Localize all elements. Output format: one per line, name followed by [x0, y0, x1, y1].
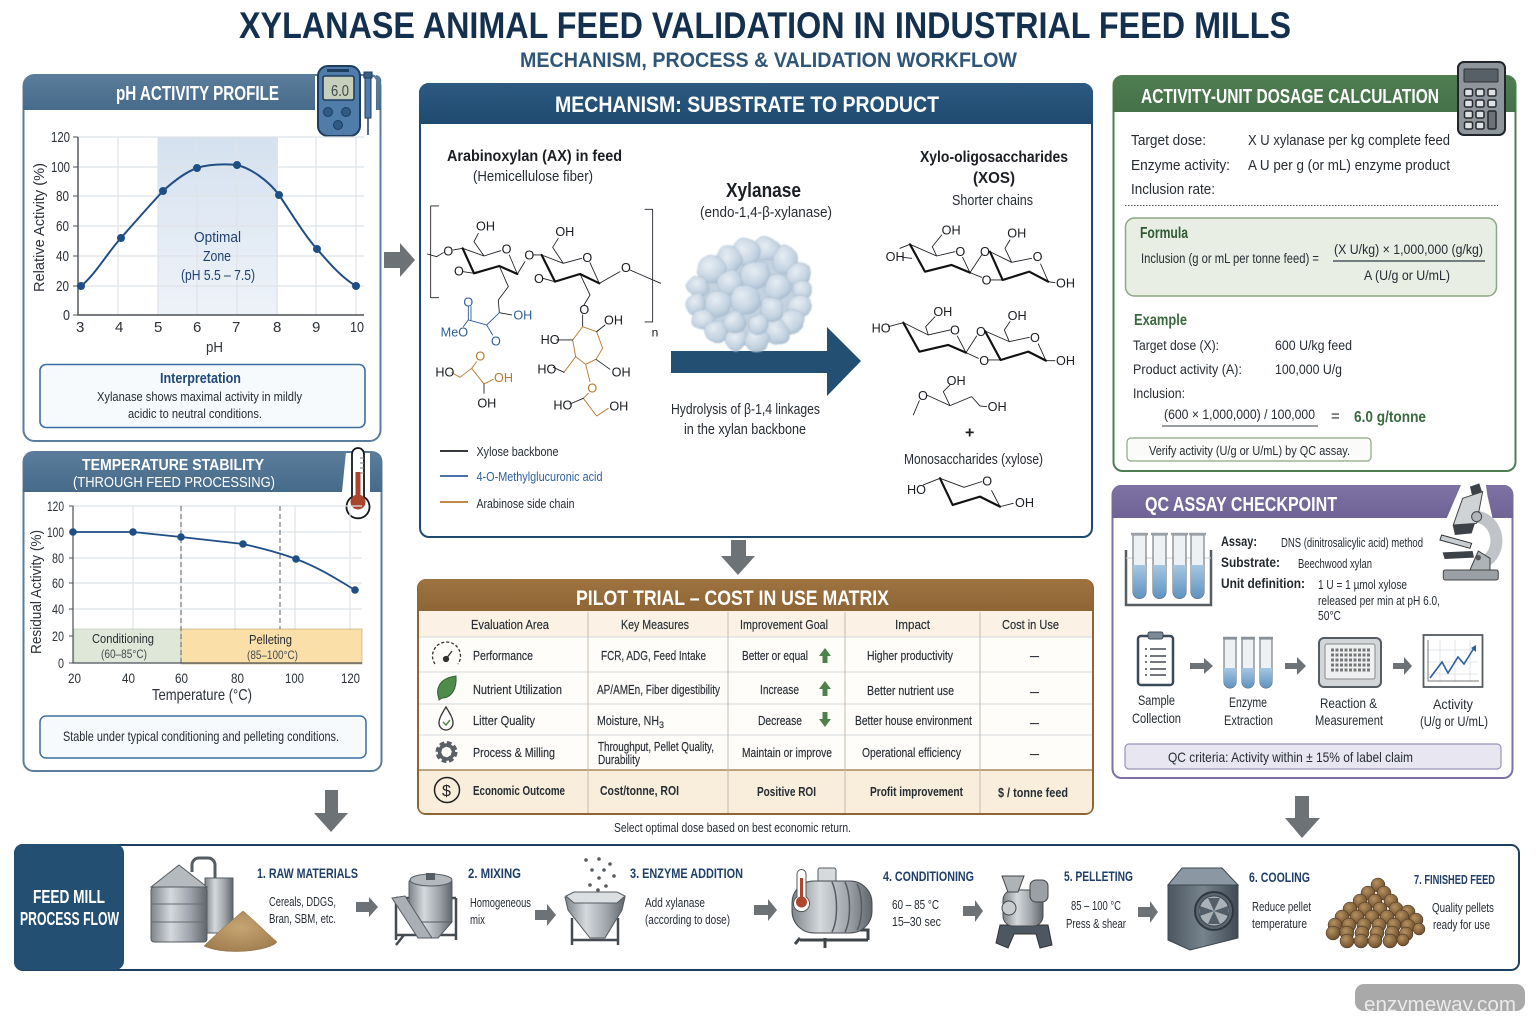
arabinoxylan structure: OH	[477, 396, 496, 410]
QC step: reaction and measurement: Measurement	[1315, 712, 1383, 728]
pH activity line chart: Relative Activity (%)	[31, 163, 48, 292]
icon: pH meter	[318, 66, 378, 136]
XOS structures: O	[955, 245, 965, 259]
step 6: cooling: 6. COOLING	[1249, 869, 1310, 885]
pH activity line chart: 20	[56, 278, 69, 295]
QC step: sample collection: Sample	[1138, 692, 1175, 708]
step 2: mixing: 2. MIXING	[468, 865, 521, 881]
panel: dosage calculation	[1113, 62, 1516, 471]
goal arrows	[819, 648, 831, 727]
temperature stability chart: 100	[285, 670, 304, 686]
row: process and milling: Operational efficiency	[862, 745, 961, 760]
QC step: activity: (U/g or U/mL)	[1420, 713, 1488, 729]
step 1: raw materials: Bran, SBM, etc.	[269, 911, 336, 926]
icon: gear	[438, 744, 454, 760]
enzyme heading	[700, 180, 832, 221]
step 7: finished feed: 7. FINISHED FEED	[1414, 872, 1495, 887]
arrow: step 1 to 2	[356, 897, 378, 917]
XOS structures: O	[979, 354, 989, 368]
XOS structures: OH	[1056, 276, 1075, 290]
temperature stability chart: 100	[47, 524, 64, 540]
QC header	[1112, 485, 1513, 518]
icon: pH meter: 6.0	[331, 83, 349, 100]
temperature stability chart	[28, 498, 362, 704]
XOS structures: OH	[1007, 227, 1026, 241]
column header row: Improvement Goal	[740, 617, 828, 632]
optimal zone label: Optimal	[194, 229, 241, 246]
temperature stability chart: 40	[122, 670, 135, 686]
pH activity line chart: 10	[350, 319, 364, 336]
worked example: Target dose (X):	[1133, 337, 1219, 353]
temperature stability chart: 120	[47, 498, 64, 514]
panel: temperature stability	[23, 448, 382, 771]
step 2: mixing: Homogeneous	[470, 895, 531, 910]
panel: pH activity profile	[23, 66, 381, 441]
icon: mixer	[392, 873, 456, 945]
QC criteria: QC criteria: Activity within ± 15% of label claim	[1168, 749, 1413, 765]
row: nutrient utilization: Increase	[760, 682, 799, 697]
pelleting band: Pelleting	[249, 632, 292, 647]
arabinoxylan structure: HO	[541, 333, 560, 347]
arabinoxylan structure: O	[502, 243, 512, 257]
XOS structures: OH	[988, 400, 1007, 414]
stability callout	[40, 716, 366, 758]
temperature stability chart: 120	[341, 670, 360, 686]
legend	[440, 444, 602, 511]
hydrolysis caption: Hydrolysis of β-1,4 linkages	[671, 402, 820, 418]
pH activity line chart: 0	[63, 307, 70, 324]
worked example: Example	[1134, 312, 1187, 329]
arabinoxylan structure: OH	[476, 220, 495, 234]
hydrolysis caption	[671, 402, 820, 438]
optimal zone label: (pH 5.5 – 7.5)	[181, 267, 255, 284]
QC step: activity: Activity	[1433, 696, 1473, 712]
interpretation callout	[40, 364, 365, 428]
step 1: raw materials	[257, 865, 358, 926]
XOS structures: O	[982, 274, 992, 288]
icon: test tube rack	[1126, 534, 1211, 605]
row: economic outcome: Positive ROI	[757, 784, 816, 799]
arabinoxylan structure: O	[443, 244, 453, 258]
arabinoxylan structure	[427, 206, 661, 416]
row: process and milling	[473, 740, 1040, 767]
arrow: step 2 to 3	[535, 904, 556, 926]
temperature stability chart: 40	[52, 601, 64, 617]
watermark	[1350, 984, 1530, 1024]
XOS structures: HO	[872, 321, 891, 335]
step 3: enzyme addition: 3. ENZYME ADDITION	[630, 865, 743, 881]
pH activity line chart	[31, 129, 364, 356]
conditioning band: (60–85°C)	[101, 647, 147, 661]
temperature stability chart: 60	[52, 575, 64, 591]
step 4: conditioning: 4. CONDITIONING	[883, 868, 974, 884]
arrow: QC step 2	[1285, 657, 1306, 675]
pH activity line chart: 7	[232, 319, 240, 336]
QC step: enzyme extraction	[1223, 638, 1273, 728]
temperature stability chart: 80	[52, 550, 64, 566]
XOS structures: O	[1033, 250, 1043, 264]
XOS structures: O	[980, 245, 990, 259]
enzyme heading: Xylanase	[726, 180, 801, 202]
process flow label	[14, 844, 124, 970]
XOS structures: OH	[1015, 496, 1034, 510]
row: process and milling: Durability	[598, 753, 641, 767]
XOS structures: OH	[1008, 309, 1027, 323]
worked example: 6.0 g/tonne	[1354, 409, 1426, 426]
arabinoxylan structure: HO	[553, 398, 572, 412]
icon: cooler	[1168, 868, 1238, 950]
row: nutrient utilization: Nutrient Utilization	[473, 682, 562, 697]
arabinoxylan structure: n	[652, 326, 658, 340]
step 7: finished feed	[1414, 872, 1495, 932]
arabinoxylan structure: MeO	[441, 325, 468, 339]
XOS structures: HO	[907, 483, 926, 497]
row: performance	[473, 648, 1040, 663]
pH activity line chart: 120	[51, 129, 70, 146]
interpretation callout: Xylanase shows maximal activity in mildly	[97, 389, 302, 404]
row: performance: –	[1030, 648, 1040, 663]
worked example: =	[1331, 408, 1340, 425]
step 4: conditioning: 15–30 sec	[892, 914, 941, 929]
row: performance: Higher productivity	[867, 648, 953, 663]
row: litter quality: Moisture, NH	[597, 713, 659, 728]
pH activity line chart: 4	[115, 319, 123, 336]
XOS structures: OH	[886, 250, 905, 264]
optimal zone label	[181, 229, 255, 284]
row: performance: Performance	[473, 648, 533, 663]
arabinoxylan structure: OH	[555, 225, 574, 239]
icon: water drop	[439, 707, 453, 730]
XOS structures: OH	[1056, 354, 1075, 368]
assay details: DNS (dinitrosalicylic acid) method	[1281, 536, 1423, 550]
assay details: Assay:	[1221, 533, 1257, 549]
XOS structures: O	[976, 325, 986, 339]
row: litter quality: Litter Quality	[473, 713, 535, 728]
monosaccharides label: Monosaccharides (xylose)	[904, 452, 1043, 468]
step 6: cooling: Reduce pellet	[1252, 899, 1311, 914]
temperature stability chart: Temperature (°C)	[152, 687, 252, 704]
formula box: Formula	[1140, 225, 1188, 242]
arrow: step 4 to 5	[963, 900, 983, 922]
arabinoxylan structure: O	[534, 272, 544, 286]
assay details: released per min at pH 6.0,	[1318, 594, 1440, 608]
dose definitions: X U xylanase per kg complete feed	[1248, 132, 1450, 149]
arabinoxylan heading: Arabinoxylan (AX) in feed	[447, 148, 622, 165]
formula box: Inclusion (g or mL per tonne feed) =	[1141, 251, 1319, 266]
icon: calculator	[1458, 62, 1505, 135]
pH activity line chart: 5	[154, 319, 162, 336]
pH activity line chart: 8	[273, 319, 281, 336]
assay details: Unit definition:	[1221, 575, 1305, 591]
arabinoxylan structure: O	[621, 261, 631, 275]
pH activity line chart: 6	[193, 319, 201, 336]
XOS structures: OH	[942, 223, 961, 237]
icon: leaf	[438, 676, 456, 700]
icon: silo and grain	[151, 858, 277, 952]
temperature stability chart: 80	[231, 670, 244, 686]
column header row	[419, 611, 1092, 637]
icon: microscope	[1440, 478, 1498, 580]
row: economic outcome: Cost/tonne, ROI	[600, 783, 679, 798]
hydrolysis caption: in the xylan backbone	[684, 422, 806, 438]
arabinoxylan structure: O	[579, 303, 589, 317]
dose definitions: Target dose:	[1131, 132, 1206, 149]
assay details: Beechwood xylan	[1298, 557, 1372, 571]
arabinoxylan structure: O	[454, 264, 464, 278]
XOS structures: O	[982, 474, 992, 488]
temperature stability chart: 0	[58, 655, 64, 671]
watermark: enzymeway.com	[1364, 994, 1516, 1016]
XOS structures: O	[1030, 331, 1040, 345]
temperature stability chart: Residual Activity (%)	[28, 530, 45, 654]
interpretation callout: Interpretation	[160, 370, 241, 387]
assay details	[1221, 533, 1440, 623]
arabinoxylan structure: O	[491, 334, 501, 348]
assay details: 50°C	[1318, 609, 1341, 623]
matrix header	[418, 579, 1093, 611]
column header row: Cost in Use	[1002, 617, 1059, 632]
arrow: hydrolysis	[671, 327, 861, 396]
icon: enzyme hopper	[565, 857, 625, 945]
arabinoxylan structure: OH	[612, 365, 631, 379]
row: litter quality: Decrease	[758, 713, 802, 728]
pH activity line chart: 3	[76, 319, 84, 336]
step 5: pelleting	[1064, 868, 1133, 931]
arabinoxylan structure: HO	[537, 362, 556, 376]
row: litter quality	[473, 713, 1040, 730]
mechanism header: MECHANISM: SUBSTRATE TO PRODUCT	[555, 92, 939, 117]
XOS heading: Xylo-oligosaccharides	[920, 149, 1068, 166]
step 4: conditioning: 60 – 85 °C	[892, 897, 939, 912]
step 5: pelleting: Press & shear	[1066, 916, 1126, 931]
XOS structures: OH	[947, 374, 966, 388]
row: nutrient utilization	[473, 682, 1040, 699]
QC step: enzyme extraction: Enzyme	[1229, 694, 1267, 710]
XOS structures: OH	[933, 305, 952, 319]
step 3: enzyme addition	[630, 865, 743, 927]
dose definitions: Enzyme activity:	[1131, 157, 1230, 174]
icon: gauge	[432, 642, 461, 664]
arrow: step 5 to 6	[1138, 901, 1158, 923]
legend: Arabinose side chain	[476, 496, 574, 511]
verify note	[1127, 438, 1371, 461]
formula box	[1126, 218, 1496, 296]
worked example: 100,000 U/g	[1275, 361, 1342, 377]
temperature stability chart: 60	[175, 670, 188, 686]
QC header: QC ASSAY CHECKPOINT	[1145, 494, 1337, 516]
mechanism header	[419, 83, 1093, 124]
process flow label: FEED MILL	[33, 887, 105, 907]
step 5: pelleting: 85 – 100 °C	[1071, 898, 1121, 913]
worked example: 600 U/kg feed	[1275, 337, 1352, 353]
XOS structures: O	[950, 323, 960, 337]
icon: dollar	[434, 778, 460, 802]
row: process and milling: Process & Milling	[473, 745, 555, 760]
row: nutrient utilization: –	[1030, 684, 1040, 699]
row: process and milling: –	[1030, 746, 1040, 761]
temperature panel header: (THROUGH FEED PROCESSING)	[73, 474, 275, 491]
XOS structures: +	[965, 424, 974, 441]
panel: mechanism	[419, 83, 1093, 537]
QC criteria	[1125, 744, 1501, 769]
XOS heading	[920, 149, 1068, 209]
worked example: (600 × 1,000,000) / 100,000	[1164, 406, 1315, 422]
pelleting band: (85–100°C)	[247, 648, 298, 662]
row: performance: FCR, ADG, Feed Intake	[601, 648, 706, 663]
dosage header	[1113, 76, 1516, 112]
dose definitions: Inclusion rate:	[1131, 181, 1215, 198]
panel: QC assay	[1112, 478, 1513, 778]
QC step: reaction and measurement: Reaction &	[1320, 695, 1378, 711]
pH activity line chart: 100	[51, 159, 70, 176]
XOS structures	[872, 223, 1075, 510]
row: economic outcome: Profit improvement	[870, 784, 964, 799]
subtitle: MECHANISM, PROCESS & VALIDATION WORKFLOW	[520, 49, 1017, 72]
assay details: Substrate:	[1221, 554, 1280, 570]
arabinoxylan structure: O	[463, 296, 473, 310]
icon: pellet mill	[996, 876, 1052, 948]
step 4: conditioning	[883, 868, 974, 929]
verify note: Verify activity (U/g or U/mL) by QC assay.	[1149, 443, 1350, 458]
step 3: enzyme addition: Add xylanase	[645, 895, 705, 910]
temperature stability chart: 20	[68, 670, 81, 686]
row: economic outcome: Economic Outcome	[473, 783, 565, 798]
row: performance: Better or equal	[742, 648, 808, 663]
arabinoxylan heading: (Hemicellulose fiber)	[473, 168, 593, 185]
arabinoxylan structure: HO	[435, 366, 454, 380]
arabinoxylan structure: OH	[604, 314, 623, 328]
step 7: finished feed: ready for use	[1433, 917, 1490, 932]
legend: Xylose backbone	[476, 444, 558, 459]
arabinoxylan structure: O	[475, 349, 485, 363]
enzyme heading: (endo-1,4-β-xylanase)	[700, 204, 832, 221]
title: XYLANASE ANIMAL FEED VALIDATION IN INDUSTRIAL FEED MILLS	[239, 5, 1291, 46]
arrow: mechanism to matrix	[721, 540, 755, 575]
icon: xylanase enzyme	[685, 236, 812, 352]
pelleting band	[181, 629, 362, 664]
QC step: reaction and measurement	[1315, 638, 1383, 728]
pH activity line chart: 40	[56, 248, 69, 265]
XOS heading: (XOS)	[973, 170, 1015, 187]
conditioning band	[74, 629, 181, 663]
matrix rows	[419, 612, 1092, 813]
QC step: enzyme extraction: Extraction	[1224, 712, 1273, 728]
formula box: (X U/kg) × 1,000,000 (g/kg)	[1334, 242, 1483, 257]
pH activity line chart: 9	[312, 319, 320, 336]
arabinoxylan structure: O	[587, 381, 597, 395]
step 2: mixing: mix	[470, 912, 485, 927]
dose definitions	[1131, 132, 1451, 198]
optimal zone label: Zone	[203, 248, 231, 265]
arrow: QC step 3	[1393, 657, 1412, 675]
QC step: sample collection	[1132, 632, 1181, 726]
arabinoxylan structure: OH	[494, 371, 513, 385]
column header row: Key Measures	[621, 617, 689, 632]
row: litter quality: –	[1030, 715, 1040, 730]
assay details: 1 U = 1 µmol xylose	[1318, 578, 1407, 592]
arrow: QC step 1	[1190, 658, 1213, 674]
row: litter quality: Better house environment	[855, 713, 972, 728]
icon: feed pellets	[1326, 878, 1425, 948]
icon: conditioner	[792, 868, 872, 948]
stability callout: Stable under typical conditioning and pelleting conditions.	[63, 728, 339, 744]
pH panel header	[23, 75, 381, 110]
matrix header: PILOT TRIAL – COST IN USE MATRIX	[576, 587, 889, 610]
arabinoxylan structure: O	[524, 249, 534, 263]
conditioning band: Conditioning	[92, 631, 154, 646]
pH activity line chart: pH	[206, 339, 223, 356]
step 7: finished feed: Quality pellets	[1432, 900, 1494, 915]
worked example: Inclusion:	[1133, 385, 1185, 401]
temperature stability chart: 20	[52, 628, 64, 644]
pH activity line chart: 80	[56, 188, 69, 205]
icon: thermometer	[345, 448, 371, 518]
arabinoxylan heading	[447, 148, 622, 185]
dosage header: ACTIVITY-UNIT DOSAGE CALCULATION	[1141, 86, 1439, 108]
XOS heading: Shorter chains	[952, 192, 1033, 209]
column header row: Impact	[895, 617, 930, 632]
arabinoxylan structure: O	[582, 251, 592, 265]
row: process and milling: Throughput, Pellet Quality,	[598, 740, 714, 754]
step 1: raw materials: Cereals, DDGS,	[269, 894, 336, 909]
row: litter quality: 3	[659, 720, 664, 730]
step 2: mixing	[468, 865, 531, 927]
dose definitions: A U per g (or mL) enzyme product	[1248, 157, 1451, 174]
step 6: cooling	[1249, 869, 1311, 931]
formula box: A (U/g or U/mL)	[1364, 268, 1450, 283]
panel: pilot trial matrix	[418, 579, 1093, 814]
column header row: Evaluation Area	[471, 617, 550, 632]
worked example	[1133, 312, 1426, 426]
arrow: QC to process flow	[1285, 796, 1320, 838]
row: nutrient utilization: AP/AMEn, Fiber digestibility	[597, 682, 720, 697]
QC step: sample collection: Collection	[1132, 710, 1181, 726]
step 6: cooling: temperature	[1252, 916, 1307, 931]
icon: dollar: $	[442, 783, 451, 800]
interpretation callout: acidic to neutral conditions.	[128, 406, 262, 421]
pH activity line chart: 60	[56, 218, 69, 235]
row: economic outcome: $ / tonne feed	[998, 785, 1068, 800]
matrix footnote: Select optimal dose based on best economic return.	[614, 821, 851, 835]
worked example: Product activity (A):	[1133, 361, 1242, 377]
legend: 4-O-Methylglucuronic acid	[476, 469, 602, 484]
row: process and milling: Maintain or improve	[742, 745, 832, 760]
process flow label: PROCESS FLOW	[20, 909, 119, 929]
step 3: enzyme addition: (according to dose)	[645, 912, 730, 927]
arrow: left to mechanism	[384, 243, 415, 277]
step 1: raw materials: 1. RAW MATERIALS	[257, 865, 358, 881]
row: economic outcome	[473, 783, 1068, 800]
step 5: pelleting: 5. PELLETING	[1064, 868, 1133, 884]
arabinoxylan structure: OH	[513, 309, 532, 323]
temperature panel header: TEMPERATURE STABILITY	[82, 457, 264, 474]
arrow: temperature to process flow	[314, 790, 348, 832]
pH panel header: pH ACTIVITY PROFILE	[116, 83, 279, 105]
XOS structures: O	[918, 389, 928, 403]
arabinoxylan structure: OH	[609, 400, 628, 414]
QC step: activity	[1420, 635, 1488, 729]
row: nutrient utilization: Better nutrient use	[867, 683, 954, 698]
temperature panel header	[23, 452, 382, 492]
arrow: step 3 to 4	[754, 899, 777, 921]
panel: feed mill process flow	[14, 844, 1519, 970]
